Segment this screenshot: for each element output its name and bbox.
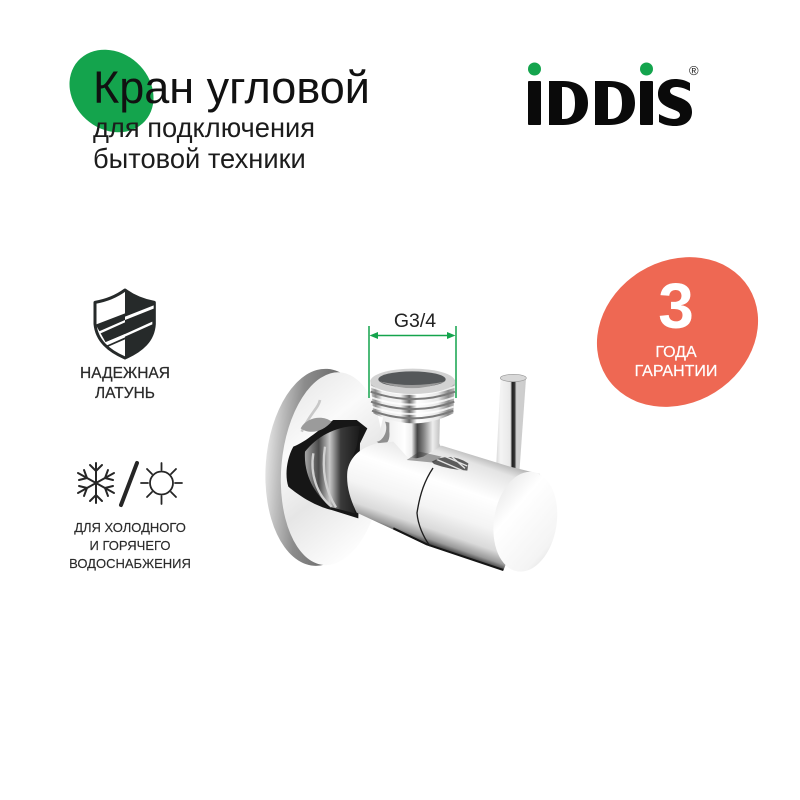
label: cold and hot water: ВОДОСНАБЖЕНИЯ bbox=[69, 556, 191, 571]
brand logo: IDDIS: ® bbox=[689, 63, 699, 78]
product: angle valve bbox=[259, 365, 564, 576]
warranty number: 3 bbox=[658, 270, 694, 342]
label: reliable brass bbox=[80, 365, 170, 402]
valve body bbox=[347, 442, 540, 571]
title: Кран угловой bbox=[93, 62, 370, 113]
valve neck bbox=[377, 413, 447, 460]
label: cold and hot water: И ГОРЯЧЕГО bbox=[90, 538, 170, 553]
green accent blob bbox=[53, 33, 170, 149]
warranty text: ГАРАНТИИ bbox=[635, 363, 717, 380]
wall plate bbox=[259, 365, 391, 570]
label: reliable brass: НАДЕЖНАЯ bbox=[80, 365, 170, 382]
dimension: G3/4 bbox=[369, 310, 456, 398]
subtitle: для подключения bbox=[93, 112, 315, 143]
brand logo: IDDIS bbox=[528, 62, 699, 126]
icon: slash bbox=[121, 463, 137, 505]
subtitle: бытовой техники bbox=[93, 143, 306, 174]
icon: shield bbox=[95, 290, 154, 358]
end cap bbox=[487, 467, 564, 576]
lever handle bbox=[496, 374, 526, 473]
threaded outlet bbox=[370, 369, 455, 423]
label: cold and hot water bbox=[69, 520, 191, 571]
dimension label: G3/4 bbox=[394, 310, 436, 332]
icon: snowflake bbox=[78, 463, 114, 503]
warranty text: ГОДА bbox=[655, 344, 697, 361]
icon: sun bbox=[141, 463, 182, 504]
warranty text bbox=[635, 344, 717, 380]
label: reliable brass: ЛАТУНЬ bbox=[95, 385, 155, 402]
warranty badge bbox=[569, 227, 786, 437]
label: cold and hot water: ДЛЯ ХОЛОДНОГО bbox=[74, 520, 186, 535]
subtitle bbox=[93, 112, 315, 174]
